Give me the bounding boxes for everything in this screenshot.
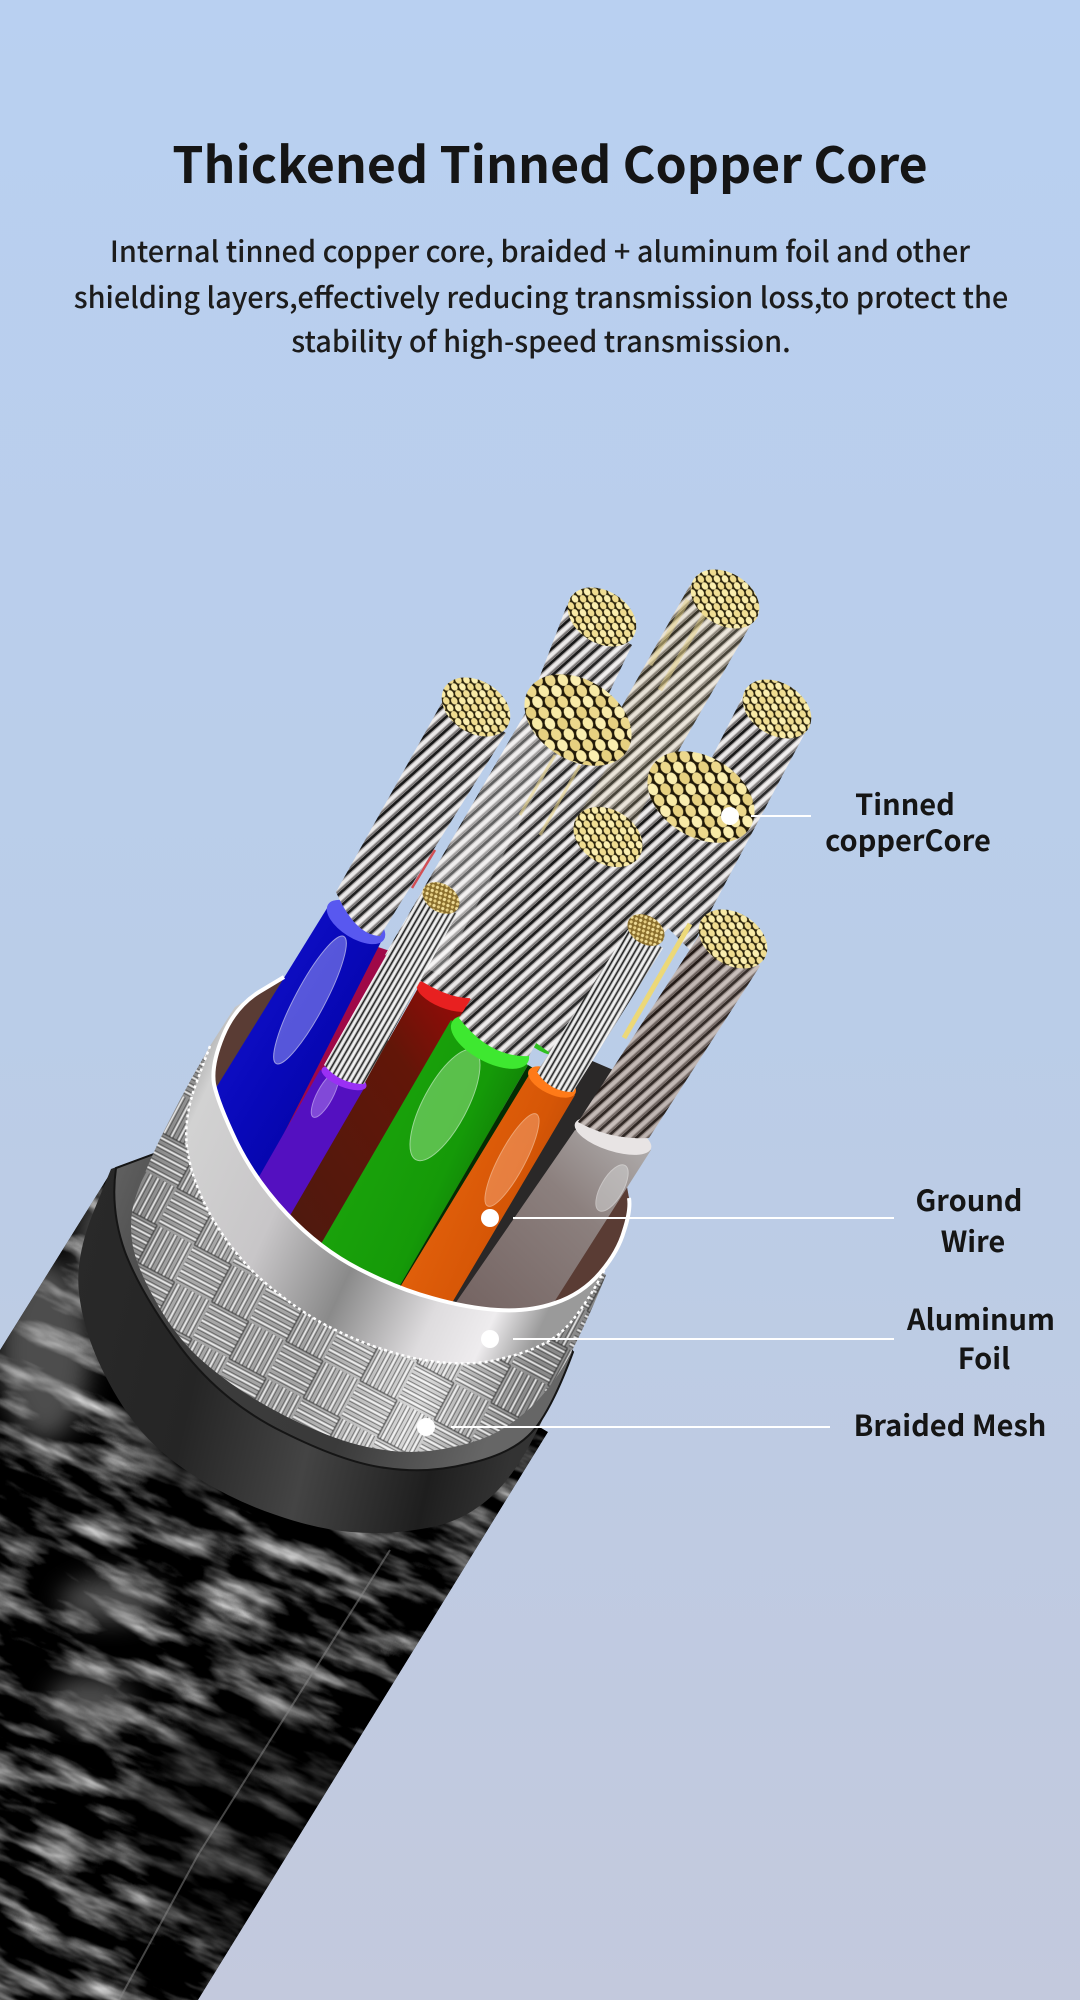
- black collar: [78, 1100, 573, 1533]
- insulated wires: [216, 674, 768, 1312]
- back copper strands: [440, 557, 822, 1040]
- callout: aluminum foil: Foil: [958, 1336, 1010, 1378]
- green wire: [300, 794, 654, 1325]
- grey wire: [430, 897, 778, 1340]
- purple wire: [259, 882, 460, 1215]
- callout: tinned copper core: Tinned: [855, 782, 955, 824]
- crimson sheath: [284, 947, 388, 1133]
- ring opening: [213, 977, 629, 1310]
- collar top face: [114, 1100, 573, 1470]
- orange wire: [400, 914, 664, 1302]
- callout: aluminum foil: Aluminum: [906, 1297, 1055, 1339]
- callout: ground wire: Wire: [941, 1219, 1005, 1261]
- callout: ground wire: Ground: [916, 1178, 1022, 1220]
- description text: shielding layers,effectively reducing transmission loss,to protect the: [74, 275, 1008, 317]
- red sheath and strand: [270, 655, 648, 1280]
- callout: braided mesh: [417, 1403, 1046, 1445]
- callout: tinned copper core: [721, 782, 991, 860]
- black ground sheath: [453, 1061, 612, 1302]
- jacket seam: [119, 1550, 390, 2000]
- description text: [74, 229, 1008, 361]
- rear green strand: [534, 751, 755, 1054]
- description text: stability of high-speed transmission.: [291, 319, 791, 361]
- callout: tinned copper core: copperCore: [825, 818, 991, 860]
- cable illustration: [0, 557, 822, 2000]
- callout: aluminum foil: [481, 1297, 1055, 1378]
- braided mesh: [131, 1046, 606, 1452]
- aluminum foil band: [186, 977, 631, 1363]
- title: Thickened Tinned Copper Core: [172, 126, 928, 198]
- blue wire: [190, 665, 521, 1220]
- braided black jacket: [0, 1172, 548, 2000]
- description text: Internal tinned copper core, braided + aluminum foil and other: [110, 229, 970, 271]
- callout: ground wire: [481, 1178, 1022, 1261]
- callout: braided mesh: Braided Mesh: [854, 1403, 1046, 1445]
- foil rim highlight: [213, 977, 629, 1310]
